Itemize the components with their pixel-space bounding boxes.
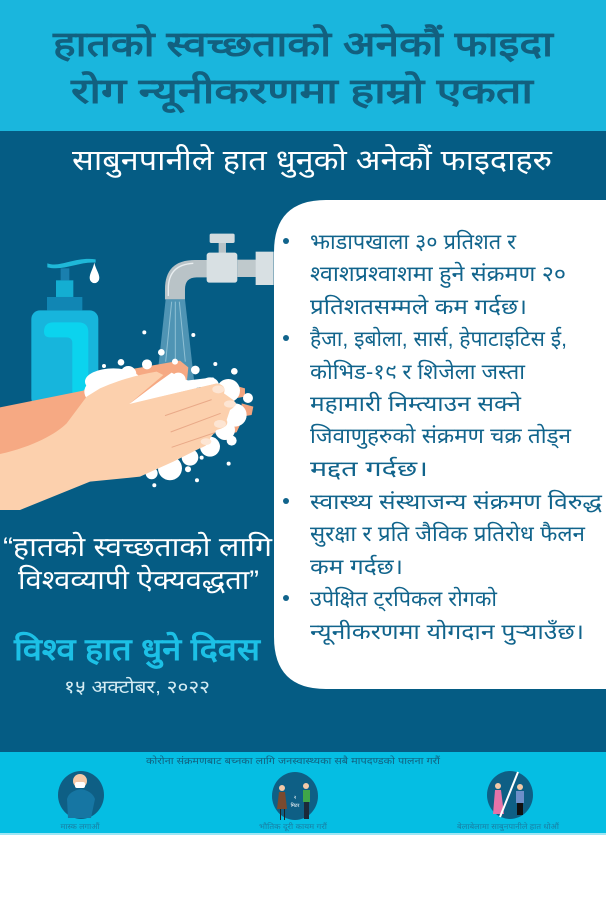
bullet 2: मद्दत गर्दछ। (310, 456, 428, 481)
bullet 3: कम गर्दछ। (310, 554, 403, 579)
event date: १५ अक्टोबर, २०२२ (64, 676, 210, 697)
label: wash hands with soap: बेलाबेलामा साबुनपानीले हात धोऔं (457, 822, 559, 832)
bullet 1 (283, 229, 566, 319)
illustration: handwashing (0, 234, 274, 510)
title line 1: हातको स्वच्छताको अनेकौं फाइदा (52, 24, 555, 64)
icon: physical distance: मिटर (291, 802, 300, 809)
event name: विश्व हात धुने दिवस (13, 631, 261, 669)
bullet 4: उपेक्षित ट्रपिकल रोगको (310, 586, 497, 612)
bullet 3: स्वास्थ्य संस्थाजन्य संक्रमण विरुद्ध (310, 489, 603, 514)
back hand (0, 361, 188, 457)
bullet 1: प्रतिशतसम्मले कम गर्दछ। (310, 294, 527, 319)
icon: physical distance: २ (294, 795, 297, 801)
bullet 2: हैजा, इबोला, सार्स, हेपाटाइटिस ई, (310, 326, 567, 351)
foam bubbles (102, 330, 253, 487)
bullet 3 (283, 489, 603, 579)
icon: physical distance (272, 772, 318, 820)
icon: water stream (157, 299, 194, 383)
slogan: “हातको स्वच्छताको लागि (3, 531, 273, 562)
bullet 3: सुरक्षा र प्रति जैविक प्रतिरोध फैलन (310, 521, 586, 547)
foam between thumb and fingers (129, 373, 217, 404)
bullet 1: झाडापखाला ३० प्रतिशत र (310, 229, 517, 254)
title line 2: रोग न्यूनीकरणमा हाम्रो एकता (70, 71, 535, 114)
label: keep distance: भौतिक दूरी कायम गरौं (259, 822, 328, 832)
panel: dark blue main (0, 131, 606, 752)
icon: faucet (165, 234, 274, 299)
benefits list (283, 229, 603, 645)
bullet 2 (283, 326, 572, 481)
subtitle: साबुनपानीले हात धुनुको अनेकौं फाइदाहरु (72, 144, 553, 178)
fingertips of back hand (228, 385, 253, 434)
bullet 2: कोभिड-१९ र शिजेला जस्ता (310, 359, 525, 384)
bullet 4 (283, 586, 584, 645)
bullet 2: जिवाणुहरुको संक्रमण चक्र तोड्न (310, 423, 572, 449)
icon: person wearing mask (58, 771, 104, 819)
soap foam (84, 366, 247, 480)
finger lines (165, 400, 221, 447)
bullet 4: न्यूनीकरणमा योगदान पुर्‍याउँछ। (310, 619, 584, 645)
footer heading: कोरोना संक्रमणबाट बच्नका लागि जनस्वास्थ्यका सबै मापदण्डको पालना गरौं (146, 755, 441, 767)
label: wear mask: मास्क लगाऔं (60, 822, 100, 831)
slogan (3, 531, 273, 595)
icon: soap bottle (31, 259, 99, 407)
panel: title band (0, 0, 606, 131)
front hand (0, 372, 235, 510)
icon: wash hands regularly (487, 771, 533, 819)
slogan: विश्वव्यापी ऐक्यवद्धता” (18, 564, 259, 595)
panel: footer band (0, 752, 606, 835)
fingernails (201, 385, 236, 445)
panel: white benefits card (274, 200, 606, 689)
bullet 1: श्वाशप्रश्वाशमा हुने संक्रमण २० (310, 261, 566, 288)
bullet 2: महामारी निम्त्याउन सक्ने (310, 391, 522, 416)
